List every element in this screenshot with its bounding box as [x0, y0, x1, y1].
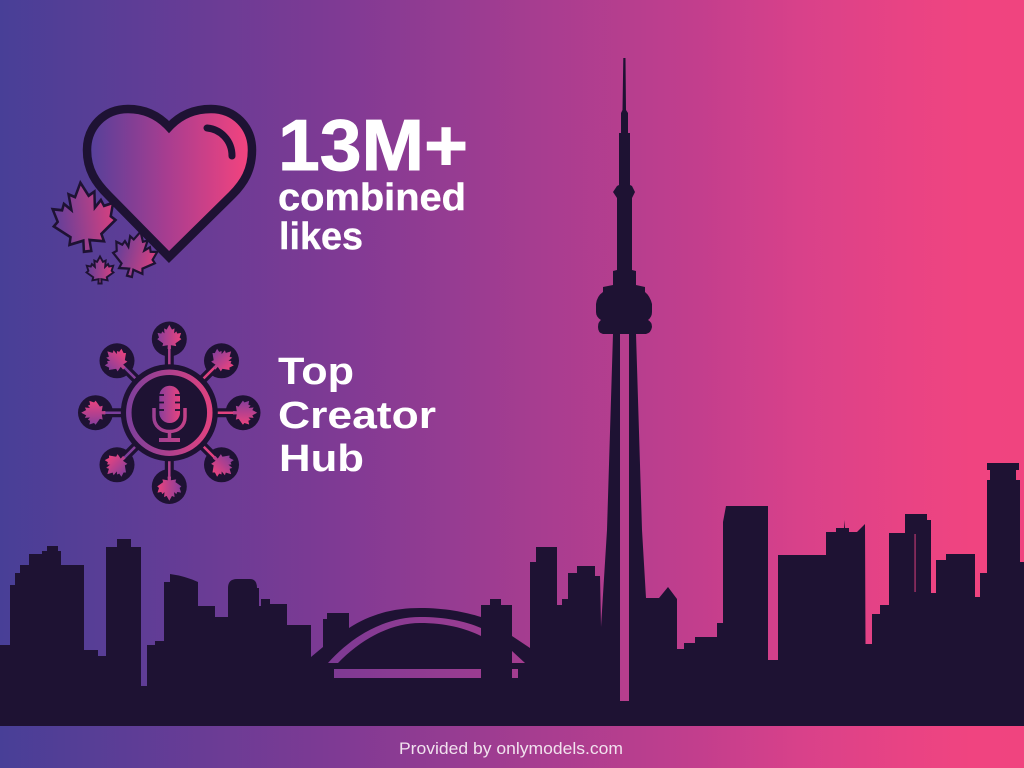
heading: Top Creator Hub	[278, 351, 436, 480]
icon: microphone hub with maple leaf nodes	[78, 322, 260, 504]
node circles	[78, 322, 260, 504]
label line 1: combined	[278, 177, 466, 219]
connectors pink	[103, 345, 236, 480]
heart	[87, 109, 252, 257]
microphone	[154, 386, 185, 440]
node maple leaves	[82, 326, 256, 500]
medium maple leaf	[109, 226, 161, 282]
footer credit: Provided by onlymodels.com	[399, 740, 623, 758]
connectors dark	[96, 340, 242, 485]
stat text: 13M+ combined likes	[278, 106, 468, 258]
headline number: 13M+	[278, 106, 468, 186]
small maple leaf	[86, 256, 114, 284]
label line 2: likes	[279, 216, 363, 258]
heart highlight	[207, 128, 232, 156]
central hub ring	[121, 364, 218, 461]
icon: heart with maple leaves	[50, 109, 252, 284]
line 1: Top	[278, 351, 354, 393]
line 2: Creator	[278, 395, 436, 437]
line 3: Hub	[279, 438, 364, 480]
large maple leaf	[50, 179, 118, 255]
